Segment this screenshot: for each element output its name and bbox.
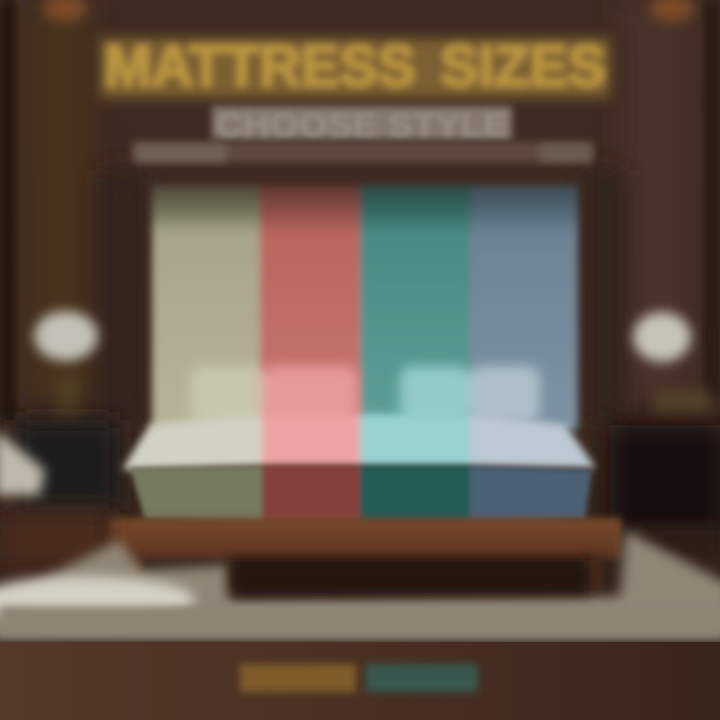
bottom label: gold bbox=[240, 664, 356, 692]
ceiling lights bbox=[43, 0, 694, 22]
nightstands bbox=[15, 420, 720, 535]
subtitle: CHOOSE STYLE bbox=[216, 107, 508, 143]
right lamp bbox=[633, 312, 710, 416]
bottom band bbox=[0, 642, 720, 720]
headboard colour panels bbox=[152, 185, 578, 430]
title bbox=[100, 34, 610, 99]
floor and rug bbox=[0, 510, 720, 640]
mattress side bands bbox=[130, 466, 592, 522]
left pillow bbox=[0, 430, 45, 496]
title: MATTRESS bbox=[104, 34, 416, 99]
title: SIZES bbox=[440, 34, 606, 99]
pillows bbox=[190, 366, 540, 422]
mattress top bbox=[122, 414, 596, 470]
bottom label: teal bbox=[366, 664, 478, 692]
left lamp bbox=[34, 311, 98, 420]
bed frame bbox=[108, 518, 622, 595]
caption line bbox=[132, 142, 594, 162]
